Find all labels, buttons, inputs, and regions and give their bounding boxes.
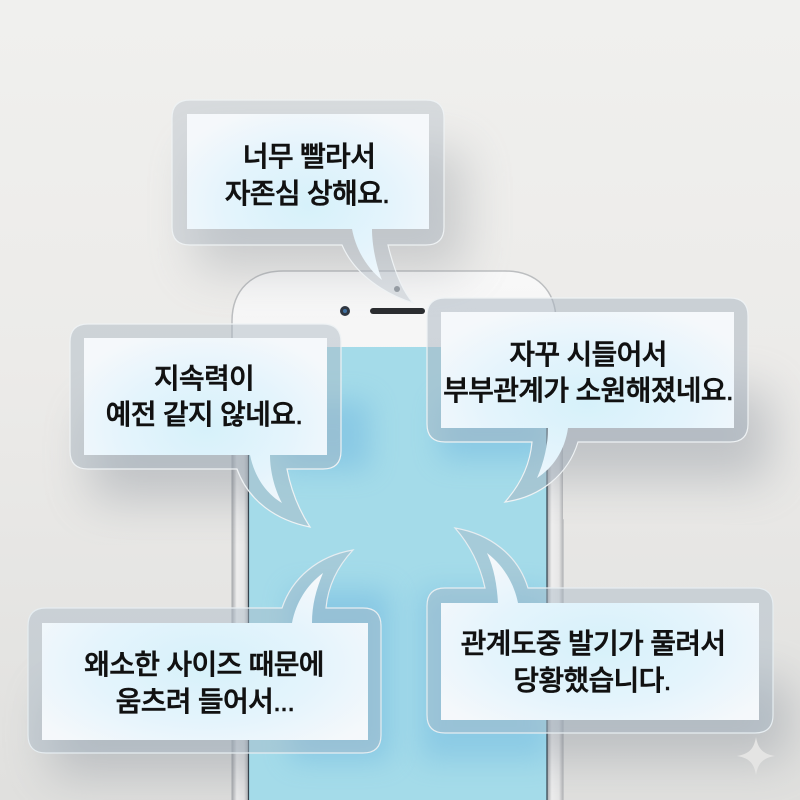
screen edge lines — [248, 347, 547, 800]
panel with tail — [84, 338, 327, 503]
glass frame with tail — [28, 550, 381, 753]
text: 지속력이 — [154, 363, 254, 394]
bubble: marital relations neglected — [427, 298, 748, 502]
panel with tail — [441, 553, 759, 720]
glass frame with tail — [172, 100, 444, 303]
bubble: lost erection during sex: 당황했습니다. — [513, 665, 671, 696]
text: 관계도중 발기가 풀려서 — [461, 628, 725, 659]
panel with tail — [187, 114, 429, 280]
bubble: too fast, hurts pride: 자존심 상해요. — [225, 178, 389, 209]
bubble: shrinking because of small size — [28, 550, 381, 753]
bubble: marital relations neglected: 부부관계가 소원해졌네요. — [443, 375, 733, 406]
bubble: lost erection during sex — [427, 528, 773, 733]
shadows on wall — [50, 150, 790, 775]
panel with tail — [441, 312, 734, 478]
panel with tail — [42, 573, 368, 740]
bubble: shrinking because of small size: 움츠려 들어서... — [116, 686, 294, 717]
text: 왜소한 사이즈 때문에 — [84, 649, 324, 680]
glass frame with tail — [427, 298, 748, 502]
phone body and bezels — [232, 271, 563, 800]
bubble: stamina not the same — [70, 324, 341, 527]
bubble: too fast, hurts pride — [172, 100, 444, 303]
camera — [340, 306, 350, 316]
speaker — [370, 308, 425, 314]
bubble: stamina not the same: 예전 같지 않네요. — [106, 399, 302, 430]
icon: sparkle — [737, 737, 775, 775]
text: 너무 빨라서 — [243, 141, 375, 172]
glass frame with tail — [70, 324, 341, 527]
text: 자꾸 시들어서 — [509, 339, 667, 370]
blue shadows on screen — [280, 400, 550, 760]
phone screen — [248, 347, 547, 800]
glass frame with tail — [427, 528, 773, 733]
sensor dot — [394, 286, 400, 292]
